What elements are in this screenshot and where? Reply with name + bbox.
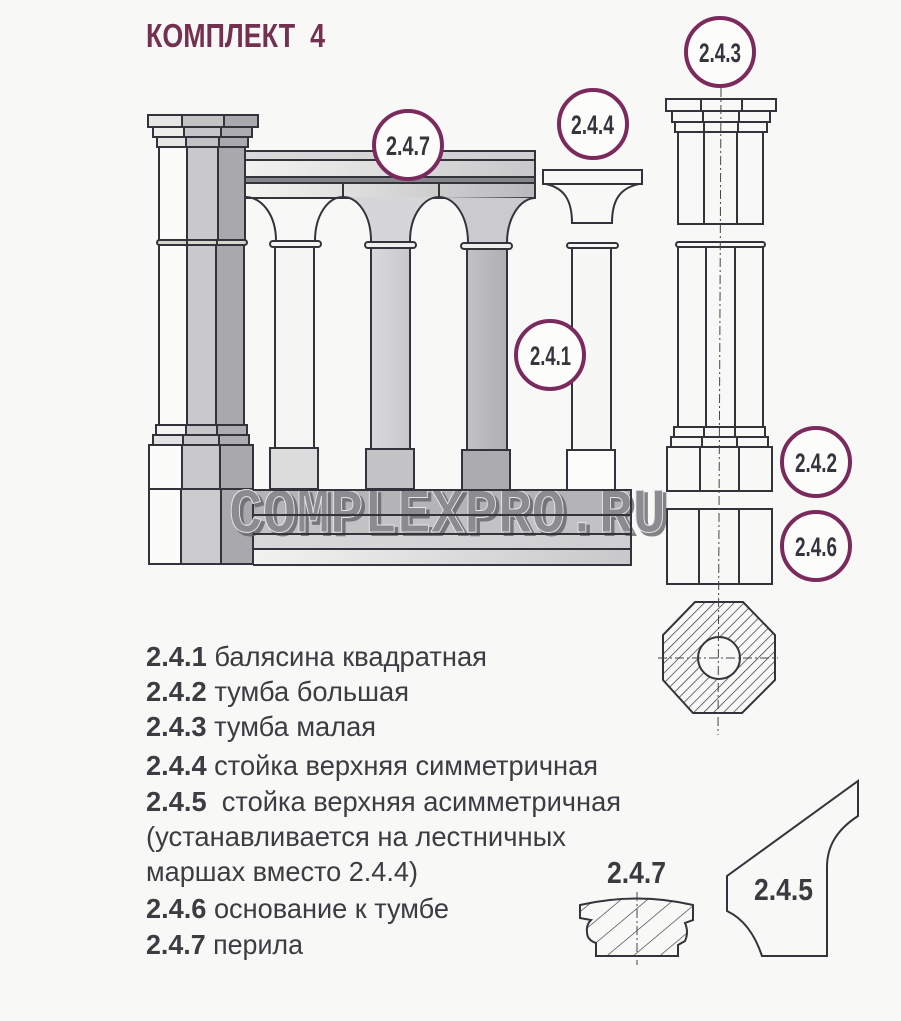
parts list: маршах вместо 2.4.4)	[146, 856, 418, 887]
arches	[245, 197, 534, 243]
drawing: railing profile 2.4.7	[580, 855, 693, 965]
callout 2.4.7: 2.4.7	[386, 131, 430, 161]
title: КОМПЛЕКТ 4	[146, 17, 326, 54]
callout 2.4.1: 2.4.1	[530, 341, 571, 371]
parts list: 2.4.1 балясина квадратная	[146, 641, 487, 672]
drawing: octagon cross-section	[658, 602, 778, 713]
drawing: railing profile 2.4.7: 2.4.7	[607, 855, 666, 890]
parts list: 2.4.4 стойка верхняя симметричная	[146, 750, 598, 781]
callout 2.4.4	[559, 90, 627, 158]
parts list: 2.4.5 стойка верхняя асимметричная	[146, 786, 621, 817]
plinth outlines	[253, 490, 631, 565]
drawing: post side view	[666, 99, 776, 584]
callout 2.4.3: 2.4.3	[699, 38, 741, 68]
parts list: 2.4.7 перила	[146, 929, 303, 960]
callout 2.4.6: 2.4.6	[795, 532, 837, 562]
parts list: 2.4.6 основание к тумбе	[146, 893, 449, 924]
center axis	[718, 88, 721, 735]
drawing: asymmetric post profile 2.4.5: 2.4.5	[754, 872, 813, 907]
callout 2.4.4: 2.4.4	[571, 110, 614, 140]
baluster 3	[461, 243, 512, 490]
parts list	[146, 641, 621, 960]
callout 2.4.6	[782, 512, 850, 580]
parts list: 2.4.3 тумба малая	[146, 711, 376, 742]
baluster 1	[270, 241, 321, 489]
corner post	[148, 115, 258, 564]
watermark: COMPLEXPRO.RU	[229, 480, 666, 551]
callout 2.4.2: 2.4.2	[795, 448, 837, 478]
baluster 2	[365, 242, 416, 489]
parts list: 2.4.2 тумба большая	[146, 676, 409, 707]
drawing: asymmetric post profile 2.4.5	[727, 781, 858, 956]
bottom plinth	[253, 490, 631, 565]
callout 2.4.7	[374, 111, 442, 179]
parts list: (устанавливается на лестничных	[146, 821, 566, 852]
drawing: single baluster with top post 2.4.4	[543, 170, 642, 490]
callout 2.4.2	[782, 428, 850, 496]
callout 2.4.3	[686, 18, 754, 86]
drawing: front elevation of balustrade	[148, 115, 631, 565]
callout 2.4.1	[516, 321, 584, 389]
watermark: COMPLEXPRO.RU	[232, 483, 669, 554]
railing 2.4.7	[245, 151, 535, 198]
